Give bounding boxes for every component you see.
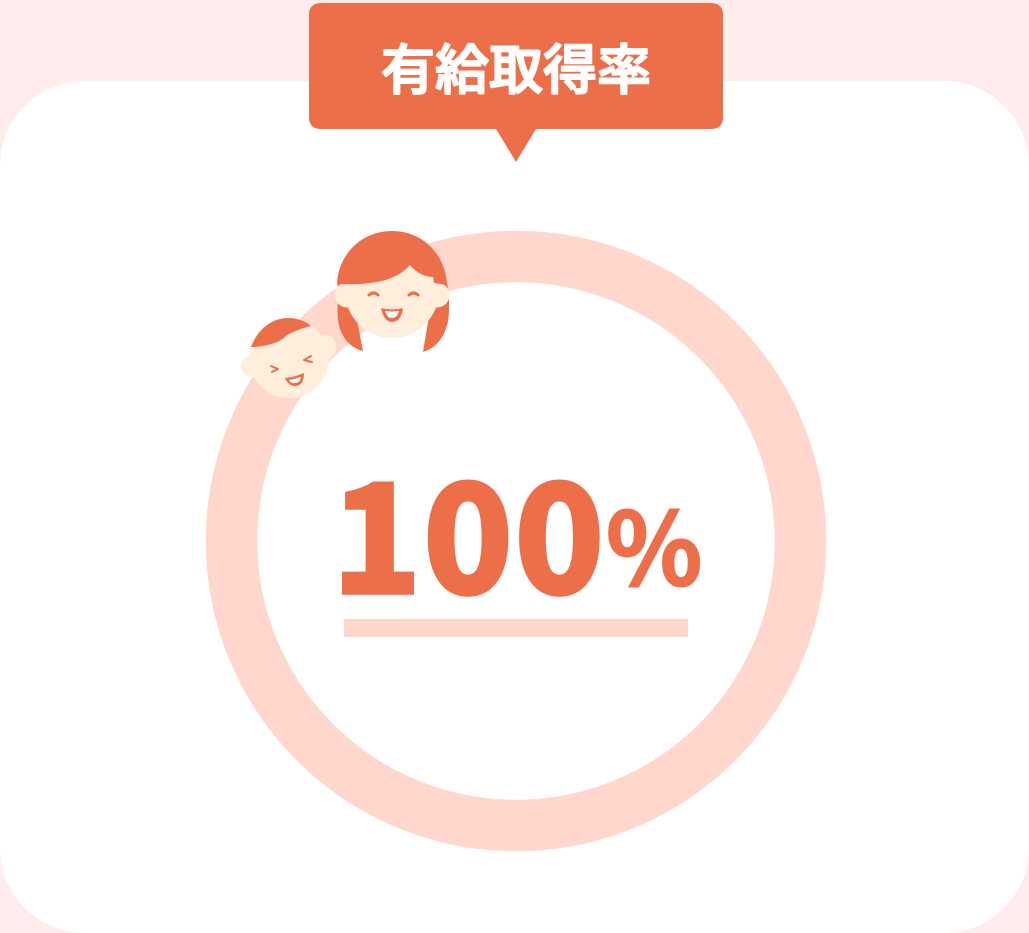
value underline [344, 619, 688, 637]
icon: mother face [334, 231, 450, 352]
donut chart ring [232, 256, 800, 826]
value: 100%: 100 [331, 421, 605, 638]
icon: baby face [241, 318, 336, 398]
value: 100%: % [606, 469, 702, 614]
heading text: 有給取得率 [381, 41, 651, 101]
heading callout [309, 3, 723, 162]
